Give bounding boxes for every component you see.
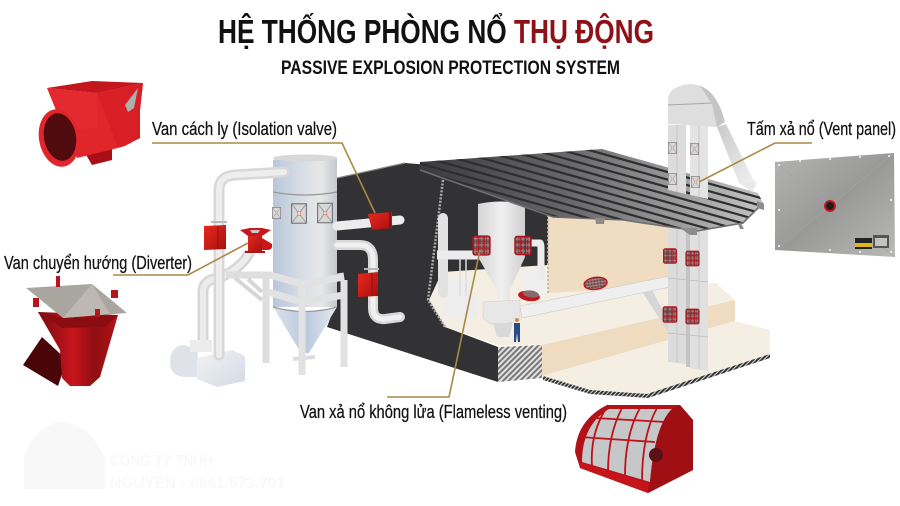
elevator cage valves: [663, 249, 699, 324]
building: walls and floors: [327, 163, 770, 398]
product: flameless venting: [575, 405, 693, 493]
warning labels: [855, 235, 889, 249]
upper duct: [219, 172, 284, 355]
upper cream floor: [429, 265, 735, 345]
discharge chute: [717, 124, 757, 190]
leader line: isolation valve: [152, 143, 375, 213]
interior hopper box: [483, 300, 520, 324]
lower cream floor: [542, 321, 770, 395]
watermark: CÔNG TY TNHH: [110, 451, 213, 470]
elevator vent panels: [668, 143, 700, 187]
tank cylinder: [273, 155, 337, 307]
label: flameless venting: Van xả nổ không lửa (Flameless venting): [300, 401, 567, 422]
corrugated roof: [420, 149, 764, 235]
leader line: diverter: [113, 243, 248, 275]
red rectangular valve left: [204, 222, 227, 250]
product: diverter: [23, 276, 127, 386]
motor box: [197, 350, 245, 387]
screw conveyor: [520, 276, 670, 318]
flange disc: [649, 448, 663, 462]
product: isolation valve: [34, 81, 143, 170]
tank vent panels: [272, 203, 332, 223]
cage valves on conveyor: [517, 276, 608, 302]
right isolation pipe: [337, 220, 400, 226]
back tan wall: [548, 215, 680, 296]
dark outer wall: [327, 163, 560, 382]
fan housing: [170, 345, 198, 377]
hatched floor block: [498, 345, 542, 382]
watermark: NGUYÊN - 0961.873.701: [110, 473, 285, 492]
title: HỆ THỐNG PHÒNG NỔ THỤ ĐỘNG: [218, 12, 654, 50]
right lower pipe: [337, 245, 400, 319]
roof brackets: [595, 201, 764, 235]
leader line: flameless venting: [387, 250, 480, 397]
interior silo: [478, 202, 525, 300]
worker: [514, 318, 520, 342]
front frame: [268, 275, 344, 375]
tan step front: [542, 300, 735, 376]
interior pipes: [438, 218, 448, 293]
warning icon: [824, 200, 836, 212]
red diverter valve in system: [240, 228, 272, 253]
elevator hood: [668, 84, 725, 127]
red rectangular valve right: [358, 269, 379, 297]
red isolation valve in system: [368, 212, 392, 230]
bucket elevator lower: [668, 130, 708, 371]
tank cone: [273, 307, 337, 353]
watermark: [24, 422, 285, 492]
left return duct: [203, 252, 250, 340]
bucket elevator upper section: [668, 84, 757, 210]
floor edge hatching: [543, 354, 770, 398]
subtitle: PASSIVE EXPLOSION PROTECTION SYSTEM: [281, 58, 620, 79]
product: vent panel: [775, 153, 895, 257]
interior white boxes: [442, 280, 478, 317]
leader line: vent panel: [699, 143, 812, 182]
interior equipment: [437, 202, 670, 342]
main dust collector system: [170, 154, 400, 387]
wall top edge: [337, 163, 405, 178]
label: diverter: Van chuyển hướng (Diverter): [4, 252, 192, 273]
frame back: [226, 275, 344, 363]
wall section hatching: [428, 180, 445, 327]
elevator support: [643, 290, 668, 332]
cage valves on silo: [473, 236, 531, 255]
label: isolation valve: Van cách ly (Isolation valve): [152, 118, 337, 139]
